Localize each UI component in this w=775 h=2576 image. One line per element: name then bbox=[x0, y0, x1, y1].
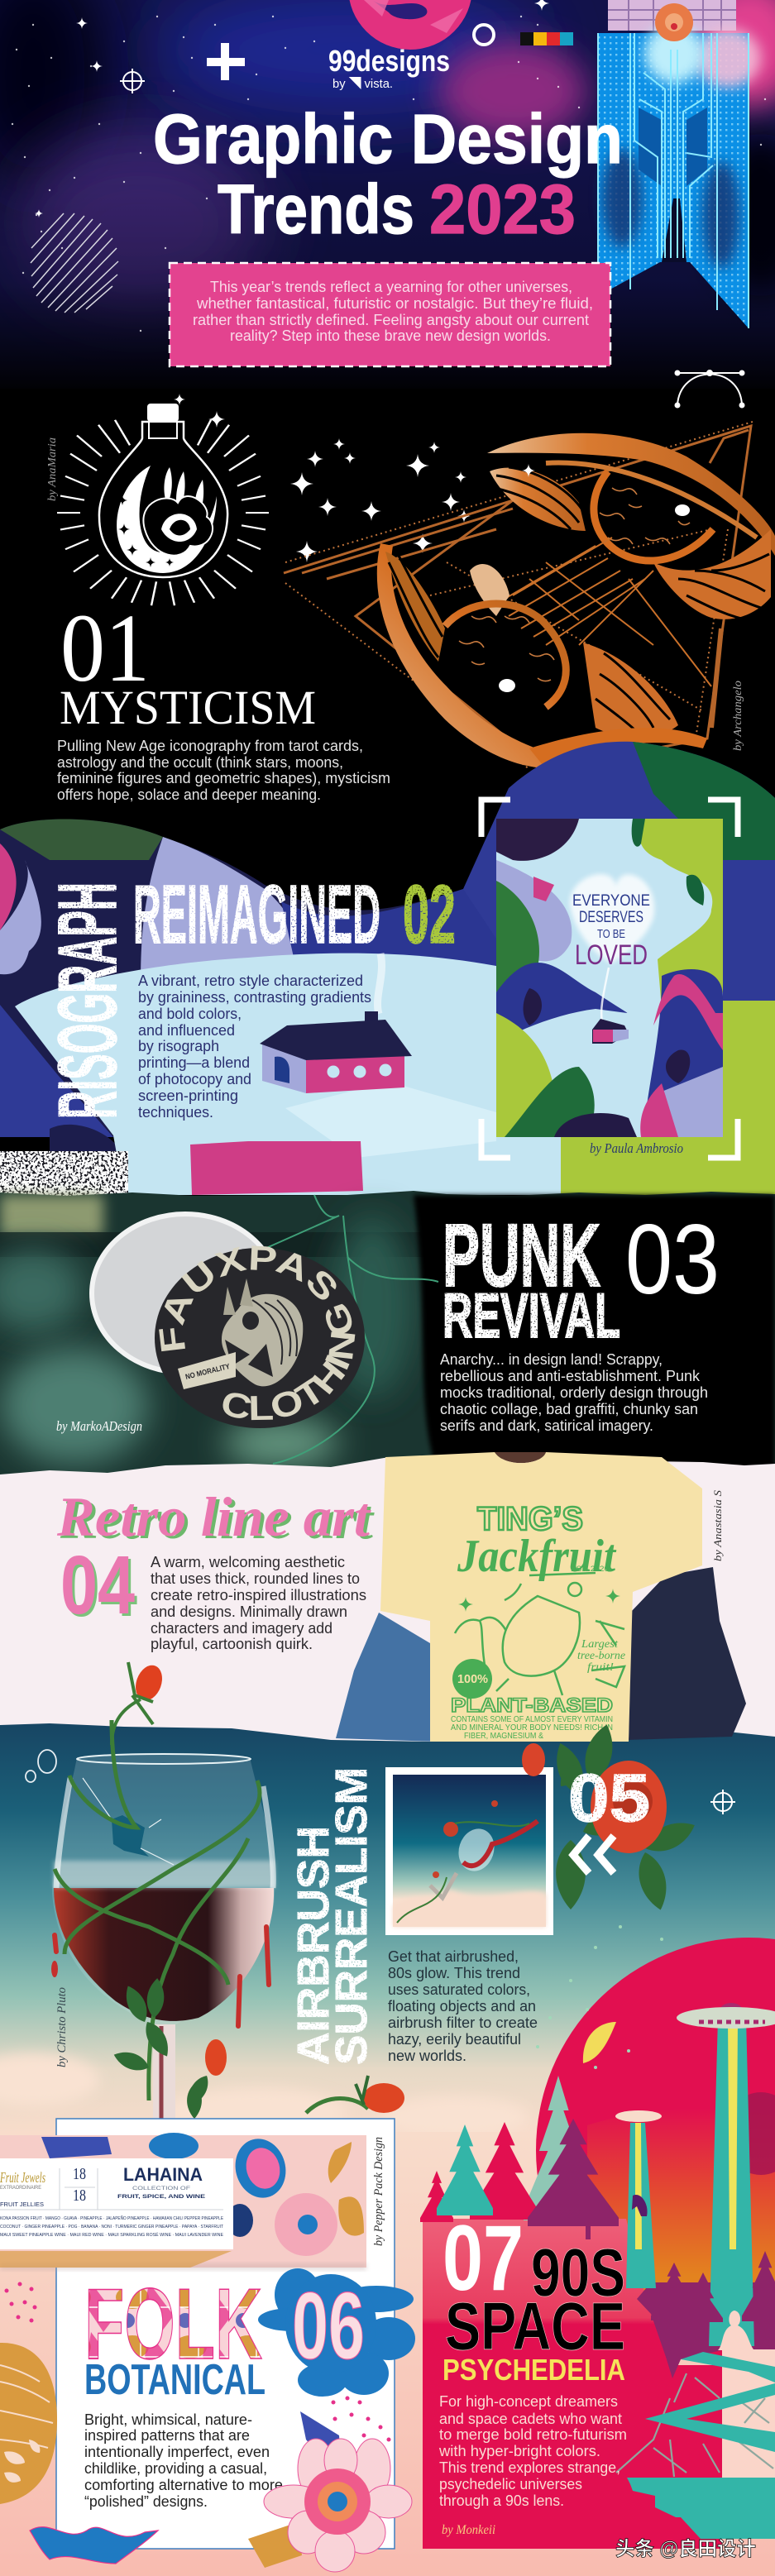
t-shirt print: AND MINERAL YOUR BODY NEEDS! RICH IN bbox=[451, 1723, 613, 1732]
label bbox=[0, 2158, 233, 2249]
credit: by Christo Pluto: by Christo Pluto bbox=[55, 1987, 69, 2067]
icon: bezier curve bbox=[675, 370, 744, 407]
poster lettering: DESERVES bbox=[579, 909, 643, 926]
illustration: house bbox=[260, 953, 412, 1093]
tree roots bbox=[616, 2373, 773, 2477]
left monstera leaf bbox=[0, 2343, 57, 2504]
heading: airbrush surrealism: AIRBRUSH bbox=[289, 1826, 338, 2065]
text: mysticism description: Pulling New Age iconography from tarot cards, bbox=[57, 738, 363, 754]
panel: bottom peach background bbox=[0, 2132, 775, 2576]
skull bbox=[222, 1294, 303, 1386]
t-shirt print: Largest bbox=[581, 1638, 619, 1651]
icon: colour swatches bbox=[520, 32, 573, 45]
snow field bbox=[15, 953, 561, 1195]
text: punk description: Anarchy... in design land! Scrappy, bbox=[440, 1351, 663, 1368]
text: space description: For high-concept dreamers bbox=[439, 2393, 618, 2410]
heading: risograph reimagined 02: 02 bbox=[403, 868, 456, 961]
icon: neon tower bbox=[598, 0, 761, 328]
heading: 01 Mysticism: MYSTICISM bbox=[60, 681, 316, 734]
sleeve: navy bbox=[629, 1567, 746, 1740]
label: MAUI SWEET PINEAPPLE WINE · MAUI RED WINE · MAUI SPARKLING ROSÉ WINE · MAUI LAVENDER WINE bbox=[0, 2232, 223, 2238]
text: space description bbox=[438, 2393, 627, 2509]
poster lettering: EVERYONE bbox=[572, 892, 650, 910]
heading: folk: FOLK bbox=[84, 2268, 262, 2380]
rosebud on retro section bbox=[112, 1661, 167, 1745]
icon: crosshair bbox=[710, 1790, 735, 1814]
credit: by Monkeii: by Monkeii bbox=[442, 2523, 495, 2537]
t-shirt print: PLANT-BASED bbox=[451, 1694, 613, 1717]
logo: 99designs by vista bbox=[328, 44, 450, 91]
heading: punk revival 03 bbox=[443, 1204, 720, 1351]
vines bbox=[55, 1720, 260, 2100]
t-shirt print: Jackfruit bbox=[457, 1531, 616, 1582]
text: airbrush description: hazy, eerily beautiful bbox=[388, 2031, 521, 2048]
label: COLLECTION OF bbox=[132, 2186, 190, 2191]
blue flower behind 06 bbox=[258, 2268, 415, 2397]
text: risograph description: by risograph bbox=[138, 1038, 219, 1054]
credit: by AnaMaria: by AnaMaria bbox=[46, 437, 59, 501]
heading: punk revival 03: REVIVAL bbox=[443, 1281, 620, 1351]
button: fauxpas clothing badge: NO MORALITY bbox=[184, 1362, 231, 1381]
text: folk description: Bright, whimsical, nature- bbox=[84, 2411, 252, 2428]
heading: 04: 04 bbox=[63, 1541, 137, 1634]
teal ripple bbox=[627, 2478, 775, 2539]
panel: section 5 sky background bbox=[0, 1704, 775, 2134]
left dome bbox=[0, 819, 513, 1137]
planet bbox=[536, 1938, 775, 2363]
number 06: 06 bbox=[292, 2273, 365, 2379]
intro text: This year’s trends reflect a yearning for other universes, bbox=[210, 279, 572, 295]
text: space description: through a 90s lens. bbox=[439, 2492, 564, 2509]
panel: airbrush surrealism bbox=[0, 1661, 735, 2138]
scatter dots bbox=[538, 1927, 662, 2067]
text: risograph description bbox=[138, 973, 371, 1121]
label: FRUIT, SPICE, AND WINE bbox=[117, 2194, 206, 2200]
sleeve: blue bbox=[336, 1613, 438, 1742]
poster lettering: TO BE bbox=[597, 927, 625, 941]
heading: 90s space: 90S bbox=[531, 2235, 625, 2311]
text: mysticism description bbox=[57, 738, 390, 803]
heading: 90s space bbox=[445, 2235, 625, 2364]
wine drips bbox=[55, 1927, 269, 2026]
intro text: reality? Step into these brave new design worlds. bbox=[230, 327, 551, 344]
text: airbrush description: uses saturated colors, bbox=[388, 1981, 530, 1998]
label: 18 bbox=[73, 2186, 86, 2205]
illustration: passion flower bbox=[248, 2398, 412, 2572]
yellow splash creature bbox=[583, 2022, 616, 2063]
t-shirt print: TING’S bbox=[477, 1501, 583, 1537]
icon: striped circle bbox=[31, 213, 118, 313]
button: back shell bbox=[92, 1214, 279, 1373]
yeti bbox=[632, 2195, 648, 2216]
text: retro description: and designs. Minimally drawn bbox=[151, 1603, 347, 1620]
scribble lines bbox=[265, 1195, 438, 1464]
title: Graphic Design bbox=[153, 100, 623, 178]
watermark: 头条 @良田设计 bbox=[615, 2538, 756, 2560]
text: risograph description: and influenced bbox=[138, 1022, 235, 1039]
panel: folk botanical bbox=[0, 2119, 415, 2572]
label: EXTRAORDINAIRE bbox=[0, 2186, 41, 2191]
top eye bbox=[487, 433, 775, 620]
text: space description: psychedelic universes bbox=[439, 2476, 582, 2492]
cartoon fruit character bbox=[455, 1573, 624, 1695]
t-shirt print: 100% bbox=[457, 1672, 488, 1686]
heading: botanical: BOTANICAL bbox=[84, 2356, 266, 2404]
label: FRUIT JELLIES bbox=[0, 2202, 44, 2208]
text: mysticism description: astrology and the occult (think stars, moons, bbox=[57, 754, 343, 771]
label: Fruit Jewels bbox=[0, 2169, 45, 2186]
orange glow bbox=[587, 2108, 775, 2349]
right dome bbox=[463, 742, 775, 1025]
rosebuds bbox=[205, 2039, 227, 2076]
text: folk description: intentionally imperfect, even bbox=[84, 2444, 270, 2460]
packaging: Lahaina box bbox=[0, 2133, 366, 2270]
text: airbrush description: Get that airbrushed, bbox=[388, 1948, 519, 1965]
title: Trends bbox=[218, 170, 414, 248]
text: retro description bbox=[151, 1554, 366, 1652]
intro text: whether fantastical, futuristic or nostalgic. But they’re fluid, bbox=[196, 295, 593, 312]
illustration: potion bottle with moon bbox=[57, 394, 269, 605]
pine trees bbox=[420, 2076, 775, 2322]
panel: intro box bbox=[170, 263, 610, 366]
large UFO bbox=[677, 2003, 775, 2029]
small UFO bbox=[615, 2110, 662, 2122]
brush stroke: white grain bbox=[0, 1151, 128, 1197]
star field bbox=[12, 17, 765, 331]
heading: airbrush surrealism: SURREALISM bbox=[327, 1767, 376, 2065]
illustration: rose and leaves behind 05 bbox=[522, 1721, 700, 1914]
heading: psychedelia: PSYCHEDELIA bbox=[443, 2353, 625, 2387]
brush stroke: magenta bbox=[190, 1141, 363, 1195]
t-shirt bbox=[380, 1452, 702, 1742]
illustration: wavy blue leaf bbox=[30, 2527, 158, 2564]
leaves bbox=[146, 1977, 165, 2019]
t-shirt print: fruit! bbox=[587, 1661, 614, 1674]
text: folk description: inspired patterns that are bbox=[84, 2427, 250, 2444]
t-shirt print bbox=[451, 1501, 625, 1741]
text: space description: and space cadets who want bbox=[439, 2411, 622, 2427]
heading: airbrush surrealism bbox=[289, 1767, 376, 2065]
title bbox=[153, 100, 623, 248]
icon: crosshair bbox=[120, 69, 145, 93]
text: airbrush description: airbrush filter to create bbox=[388, 2014, 538, 2031]
heading: punk revival 03: PUNK bbox=[443, 1205, 600, 1305]
text: risograph description: screen-printing bbox=[138, 1087, 238, 1104]
heading: retro line art: Retro line art bbox=[56, 1485, 371, 1548]
t-shirt print: CONTAINS SOME OF ALMOST EVERY VITAMIN bbox=[451, 1715, 613, 1724]
panel: risograph landscape bbox=[0, 742, 775, 1197]
icon: ring bbox=[474, 25, 494, 45]
text: space description: with hyper-bright colors. bbox=[438, 2443, 600, 2459]
poster: everyone deserves to be loved bbox=[496, 819, 723, 1137]
poster lettering bbox=[572, 892, 650, 971]
text: risograph description: of photocopy and bbox=[138, 1071, 251, 1087]
panel: 90s space psychedelia bbox=[420, 1927, 775, 2549]
heading: 04: 04 bbox=[60, 1539, 135, 1632]
label: KONA PASSION FRUIT · MANGO · GUAVA · PINEAPPLE · JALAPEÑO PINEAPPLE · HAWAIIAN CHILI PEPPER PINEAPPLE bbox=[0, 2215, 223, 2221]
panel: header background bbox=[0, 0, 775, 397]
purple ground bbox=[637, 2282, 775, 2378]
panel: punk revival bbox=[0, 1185, 775, 1474]
text: punk description: rebellious and anti-establishment. Punk bbox=[440, 1368, 701, 1384]
credit: by Anastasia S: by Anastasia S bbox=[711, 1489, 724, 1561]
flower bbox=[143, 496, 213, 556]
number 05: 05 bbox=[568, 1761, 650, 1836]
icon: white frame brackets bbox=[481, 800, 738, 1158]
t-shirt print: tree-borne bbox=[577, 1650, 625, 1662]
logo: 99designs by vista: by ◥ vista. bbox=[332, 77, 393, 91]
button: fauxpas clothing badge bbox=[155, 1245, 365, 1428]
button: fauxpas clothing badge: CLOTHING bbox=[223, 1303, 356, 1421]
title: 2023 bbox=[429, 170, 576, 248]
text: folk description: “polished” designs. bbox=[84, 2493, 208, 2510]
heading: 01 Mysticism: 01 bbox=[60, 594, 150, 702]
text: retro description: that uses thick, rounded lines to bbox=[151, 1570, 360, 1587]
text: folk description: childlike, providing a casual, bbox=[84, 2460, 267, 2477]
poster: floating wine glass bbox=[385, 1767, 553, 1935]
red panel bbox=[423, 2219, 722, 2549]
text: punk description: mocks traditional, orderly design through bbox=[440, 1384, 708, 1401]
illustration: wine glass with vines bbox=[51, 1720, 404, 2121]
heading: risograph reimagined 02 bbox=[41, 868, 456, 1119]
t-shirt print: FIBER, MAGNESIUM & bbox=[464, 1732, 543, 1741]
teal geometry bbox=[645, 2352, 775, 2452]
heading: risograph reimagined 02: RISOGRAPH bbox=[41, 882, 134, 1119]
text: folk description: comforting alternative to more bbox=[84, 2477, 283, 2493]
heading: risograph reimagined 02: REIMAGINED bbox=[133, 868, 380, 961]
lime ground bbox=[561, 992, 775, 1195]
illustration: copper eyes and triangles bbox=[284, 422, 775, 769]
intro text: rather than strictly defined. Feeling angsty about our current bbox=[193, 312, 589, 328]
text: folk description bbox=[84, 2411, 283, 2510]
stars constellation bbox=[290, 438, 471, 562]
panel: mysticism section background bbox=[0, 389, 775, 918]
text: airbrush description: floating objects and an bbox=[388, 1998, 536, 2014]
text: mysticism description: feminine figures and geometric shapes), mysticism bbox=[57, 770, 390, 786]
peach block bbox=[722, 2349, 775, 2478]
white card bbox=[56, 2119, 395, 2549]
credit: by Paula Ambrosio: by Paula Ambrosio bbox=[590, 1140, 683, 1156]
clouds bbox=[0, 2053, 529, 2138]
text: retro description: characters and imagery add bbox=[151, 1620, 332, 1637]
button: fauxpas clothing badge: FAUXPAS bbox=[159, 1245, 336, 1351]
panel: retro line art bbox=[0, 1452, 775, 1742]
pink dots bbox=[7, 2284, 35, 2320]
intro text bbox=[193, 279, 593, 344]
text: retro description: create retro-inspired illustrations bbox=[151, 1587, 366, 1603]
small beam bbox=[626, 2123, 656, 2288]
label: COCONUT · GINGER PINEAPPLE · POG · BANANA · NONI · TURMERIC GINGER PINEAPPLE · PAPAYA · STARFRUIT bbox=[0, 2225, 224, 2230]
text: airbrush description: new worlds. bbox=[388, 2048, 466, 2064]
icon: pink planet bbox=[348, 0, 472, 50]
text: retro description: A warm, welcoming aesthetic bbox=[151, 1554, 345, 1570]
text: risograph description: and bold colors, bbox=[138, 1006, 242, 1022]
text: space description: This trend explores strange, bbox=[439, 2459, 620, 2476]
text: punk description bbox=[440, 1351, 708, 1434]
text: mysticism description: offers hope, solace and deeper meaning. bbox=[57, 786, 321, 803]
text: risograph description: A vibrant, retro style characterized bbox=[138, 973, 363, 989]
poster lettering: LOVED bbox=[575, 939, 648, 971]
connecting strands bbox=[496, 538, 711, 686]
heading: 90s space: SPACE bbox=[445, 2289, 625, 2364]
heading: retro line art: Retro line art bbox=[60, 1488, 375, 1551]
text: retro description: playful, cartoonish quirk. bbox=[151, 1636, 313, 1652]
label: LAHAINA bbox=[123, 2164, 203, 2185]
neck bbox=[495, 1452, 546, 1463]
heading: punk revival 03: 03 bbox=[625, 1204, 720, 1315]
credit: by Pepper Pack Design: by Pepper Pack Design bbox=[372, 2137, 385, 2246]
icon: plus bbox=[207, 43, 245, 80]
text: punk description: serifs and dark, satirical imagery. bbox=[440, 1417, 653, 1434]
text: punk description: chaotic collage, bad graffiti, chunky san bbox=[440, 1401, 698, 1417]
text: space description: to merge bold retro-futurism bbox=[439, 2426, 627, 2443]
credit: by Archangelo: by Archangelo bbox=[732, 681, 744, 751]
t-shirt print: EST. 2020 bbox=[571, 1565, 609, 1573]
heading: 07: 07 bbox=[443, 2206, 524, 2310]
heading: 01 Mysticism bbox=[60, 594, 316, 734]
text: risograph description: by graininess, contrasting gradients bbox=[138, 989, 371, 1006]
text: airbrush description bbox=[388, 1948, 538, 2064]
text: risograph description: printing—a blend bbox=[138, 1054, 250, 1071]
credit: by MarkoADesign: by MarkoADesign bbox=[56, 1418, 142, 1434]
icon: chevrons bbox=[573, 1836, 614, 1873]
meditating figure bbox=[718, 2311, 754, 2350]
text: risograph description: techniques. bbox=[138, 1104, 213, 1121]
label: 18 bbox=[73, 2165, 86, 2183]
text: airbrush description: 80s glow. This trend bbox=[388, 1965, 520, 1981]
banner bbox=[178, 1352, 236, 1389]
logo: 99designs by vista: 99designs bbox=[328, 44, 450, 78]
lower eye bbox=[377, 543, 707, 769]
bubbles bbox=[26, 1750, 56, 1782]
tiny house bbox=[592, 1019, 629, 1044]
large beam bbox=[709, 2018, 754, 2346]
